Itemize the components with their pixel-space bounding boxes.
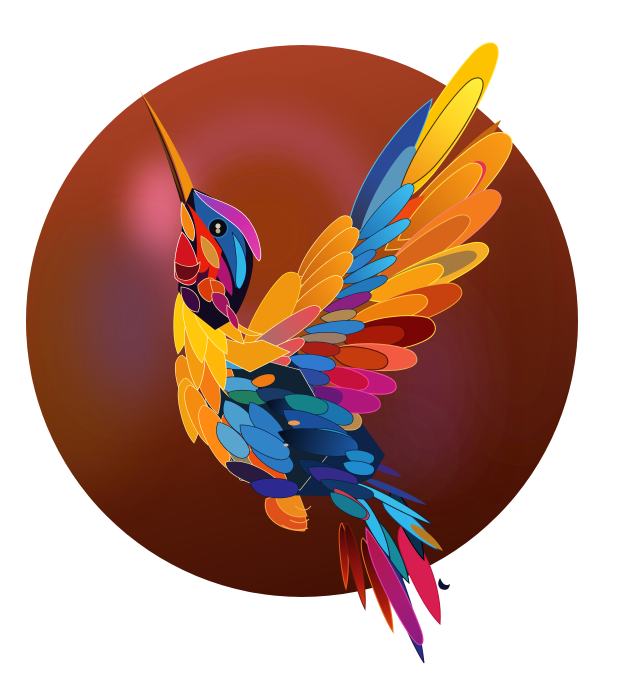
throat feathers (174, 202, 238, 330)
wing: long back feathers (297, 35, 528, 439)
wing: filler behind feathers (295, 205, 440, 405)
head blue (193, 192, 246, 288)
eye (208, 218, 228, 238)
foot (265, 490, 311, 531)
body: dark base (215, 350, 385, 496)
beak (140, 91, 194, 204)
head dark base (178, 188, 253, 330)
wing: short covert feathers (269, 180, 421, 400)
small dark feather tip (438, 578, 450, 590)
head (140, 91, 261, 330)
background circle (10, 45, 580, 597)
body: chest and flank feathers (173, 346, 340, 500)
illustration: hummingbird on a circle (26, 42, 578, 664)
cyan cheek feather (232, 232, 246, 289)
magenta crest (194, 190, 261, 261)
body: blue, teal and navy feathers (210, 352, 376, 526)
wing: orange shoulder feathers (226, 211, 367, 380)
neck and yellow breast feathers (169, 287, 290, 393)
tail feathers (338, 460, 451, 665)
purple neck feather (207, 240, 233, 296)
